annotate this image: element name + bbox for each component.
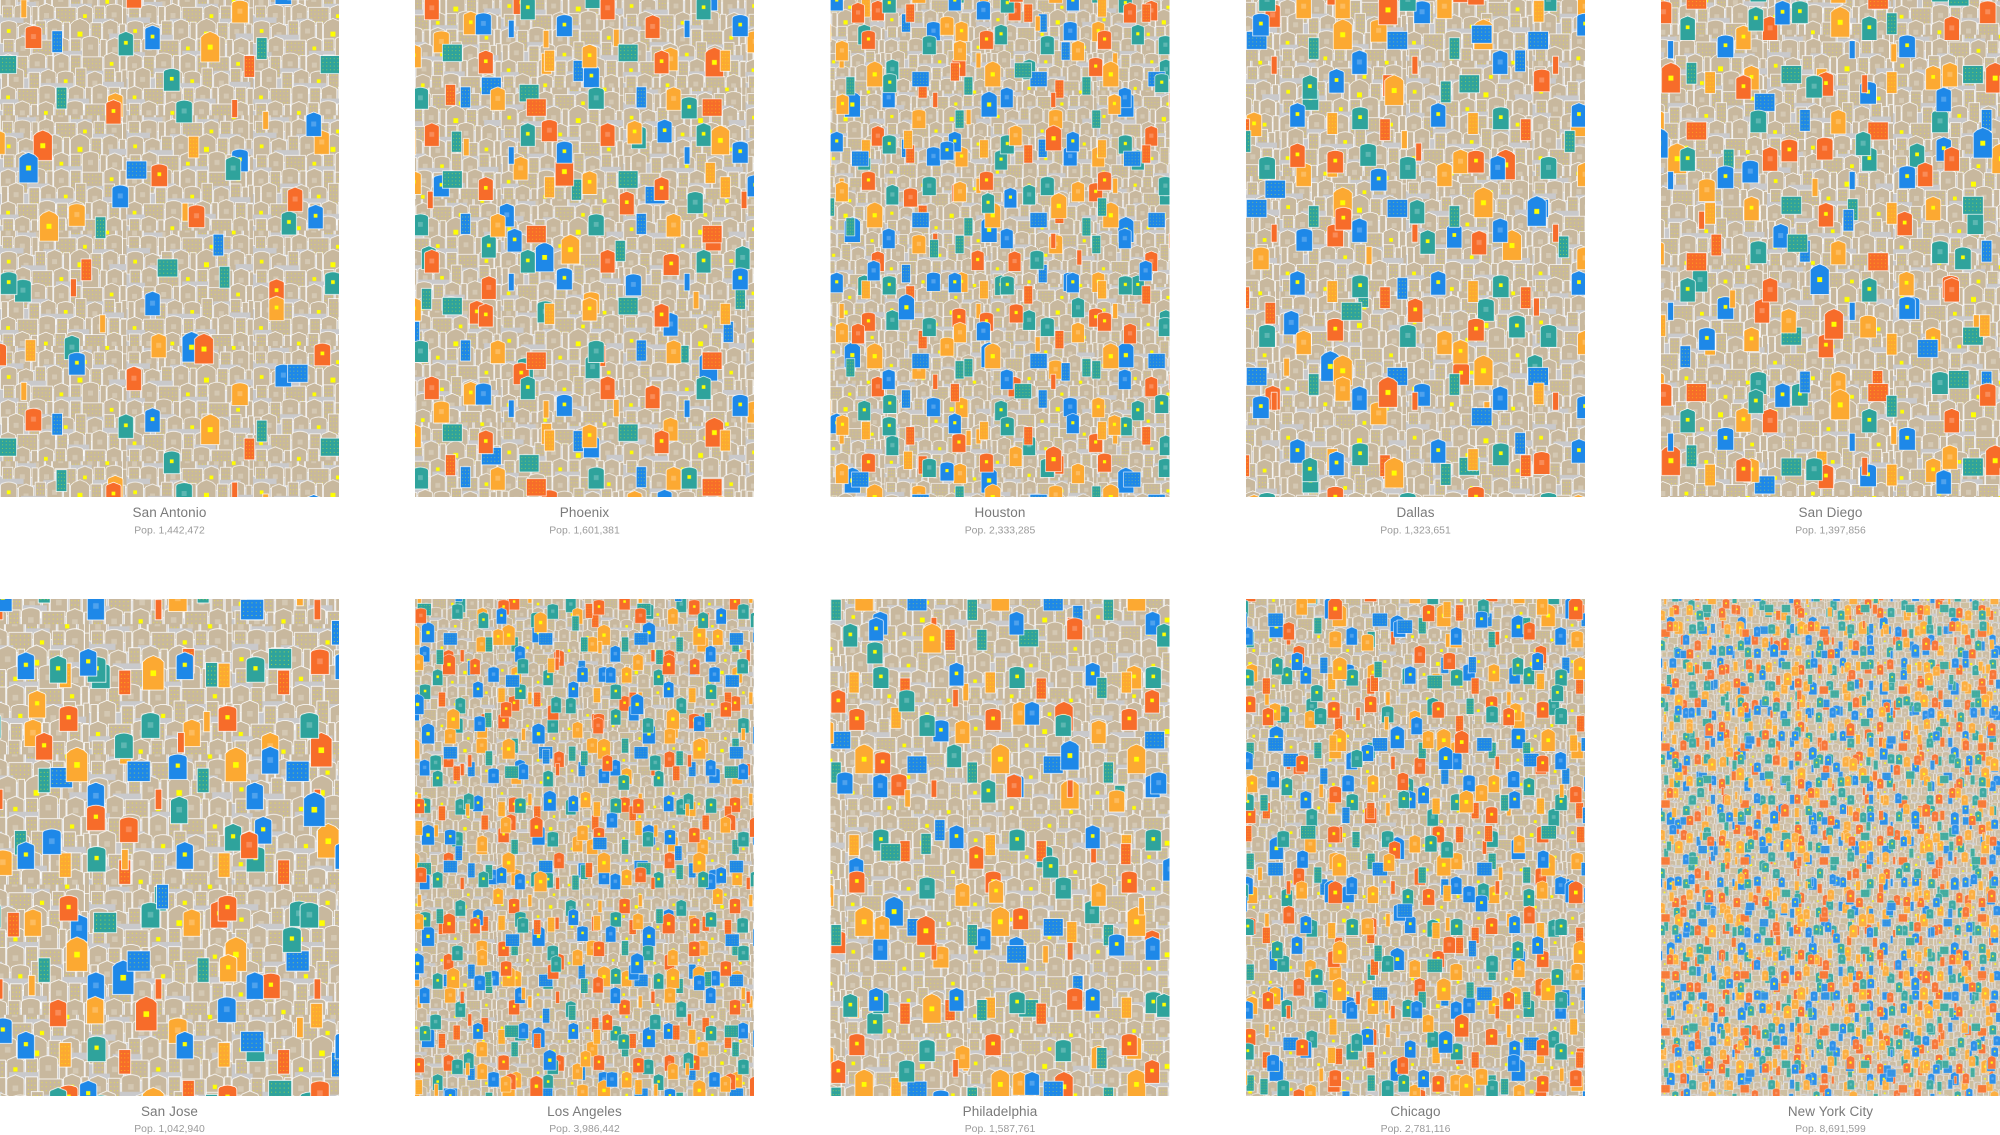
panel: Dallas bbox=[1246, 0, 1585, 536]
buildings: New York City bbox=[1661, 599, 2000, 1096]
population: Pop. 1,323,651 bbox=[1380, 526, 1451, 536]
population: Pop. 8,691,599 bbox=[1795, 1124, 1866, 1135]
population: Pop. 2,333,285 bbox=[965, 526, 1035, 536]
buildings: Houston bbox=[830, 0, 1170, 497]
panel: San Diego bbox=[1661, 0, 2000, 536]
panel: Philadelphia bbox=[830, 599, 1170, 1135]
buildings: Los Angeles bbox=[415, 599, 754, 1096]
population: Pop. 2,781,116 bbox=[1381, 1124, 1451, 1135]
city name: Chicago bbox=[1390, 1104, 1441, 1119]
panel: Phoenix bbox=[415, 0, 754, 536]
city name: Dallas bbox=[1396, 505, 1435, 520]
panel: San Jose bbox=[0, 599, 340, 1135]
panel: New York City bbox=[1661, 599, 2000, 1135]
buildings: Chicago bbox=[1246, 599, 1585, 1096]
buildings: San Jose bbox=[0, 599, 339, 1096]
population: Pop. 3,986,442 bbox=[549, 1124, 620, 1135]
panel: San Antonio bbox=[0, 0, 339, 536]
panel: Houston bbox=[830, 0, 1170, 536]
city name: Los Angeles bbox=[547, 1104, 622, 1119]
buildings: San Diego bbox=[1661, 0, 2000, 497]
buildings: Dallas bbox=[1246, 0, 1585, 497]
buildings: Phoenix bbox=[415, 0, 754, 497]
city name: Philadelphia bbox=[963, 1104, 1038, 1119]
population: Pop. 1,601,381 bbox=[549, 526, 620, 536]
city name: San Antonio bbox=[133, 505, 206, 520]
panel: Chicago bbox=[1246, 599, 1585, 1135]
city name: Phoenix bbox=[560, 505, 609, 520]
population: Pop. 1,042,940 bbox=[134, 1124, 205, 1135]
population: Pop. 1,442,472 bbox=[134, 526, 205, 536]
buildings: Philadelphia bbox=[830, 599, 1170, 1096]
buildings: San Antonio bbox=[0, 0, 339, 497]
population: Pop. 1,587,761 bbox=[965, 1124, 1035, 1135]
city name: New York City bbox=[1788, 1104, 1873, 1119]
city name: San Jose bbox=[141, 1104, 198, 1119]
city name: San Diego bbox=[1799, 505, 1862, 520]
population: Pop. 1,397,856 bbox=[1795, 526, 1866, 536]
city name: Houston bbox=[975, 505, 1025, 520]
panel: Los Angeles bbox=[415, 599, 754, 1135]
